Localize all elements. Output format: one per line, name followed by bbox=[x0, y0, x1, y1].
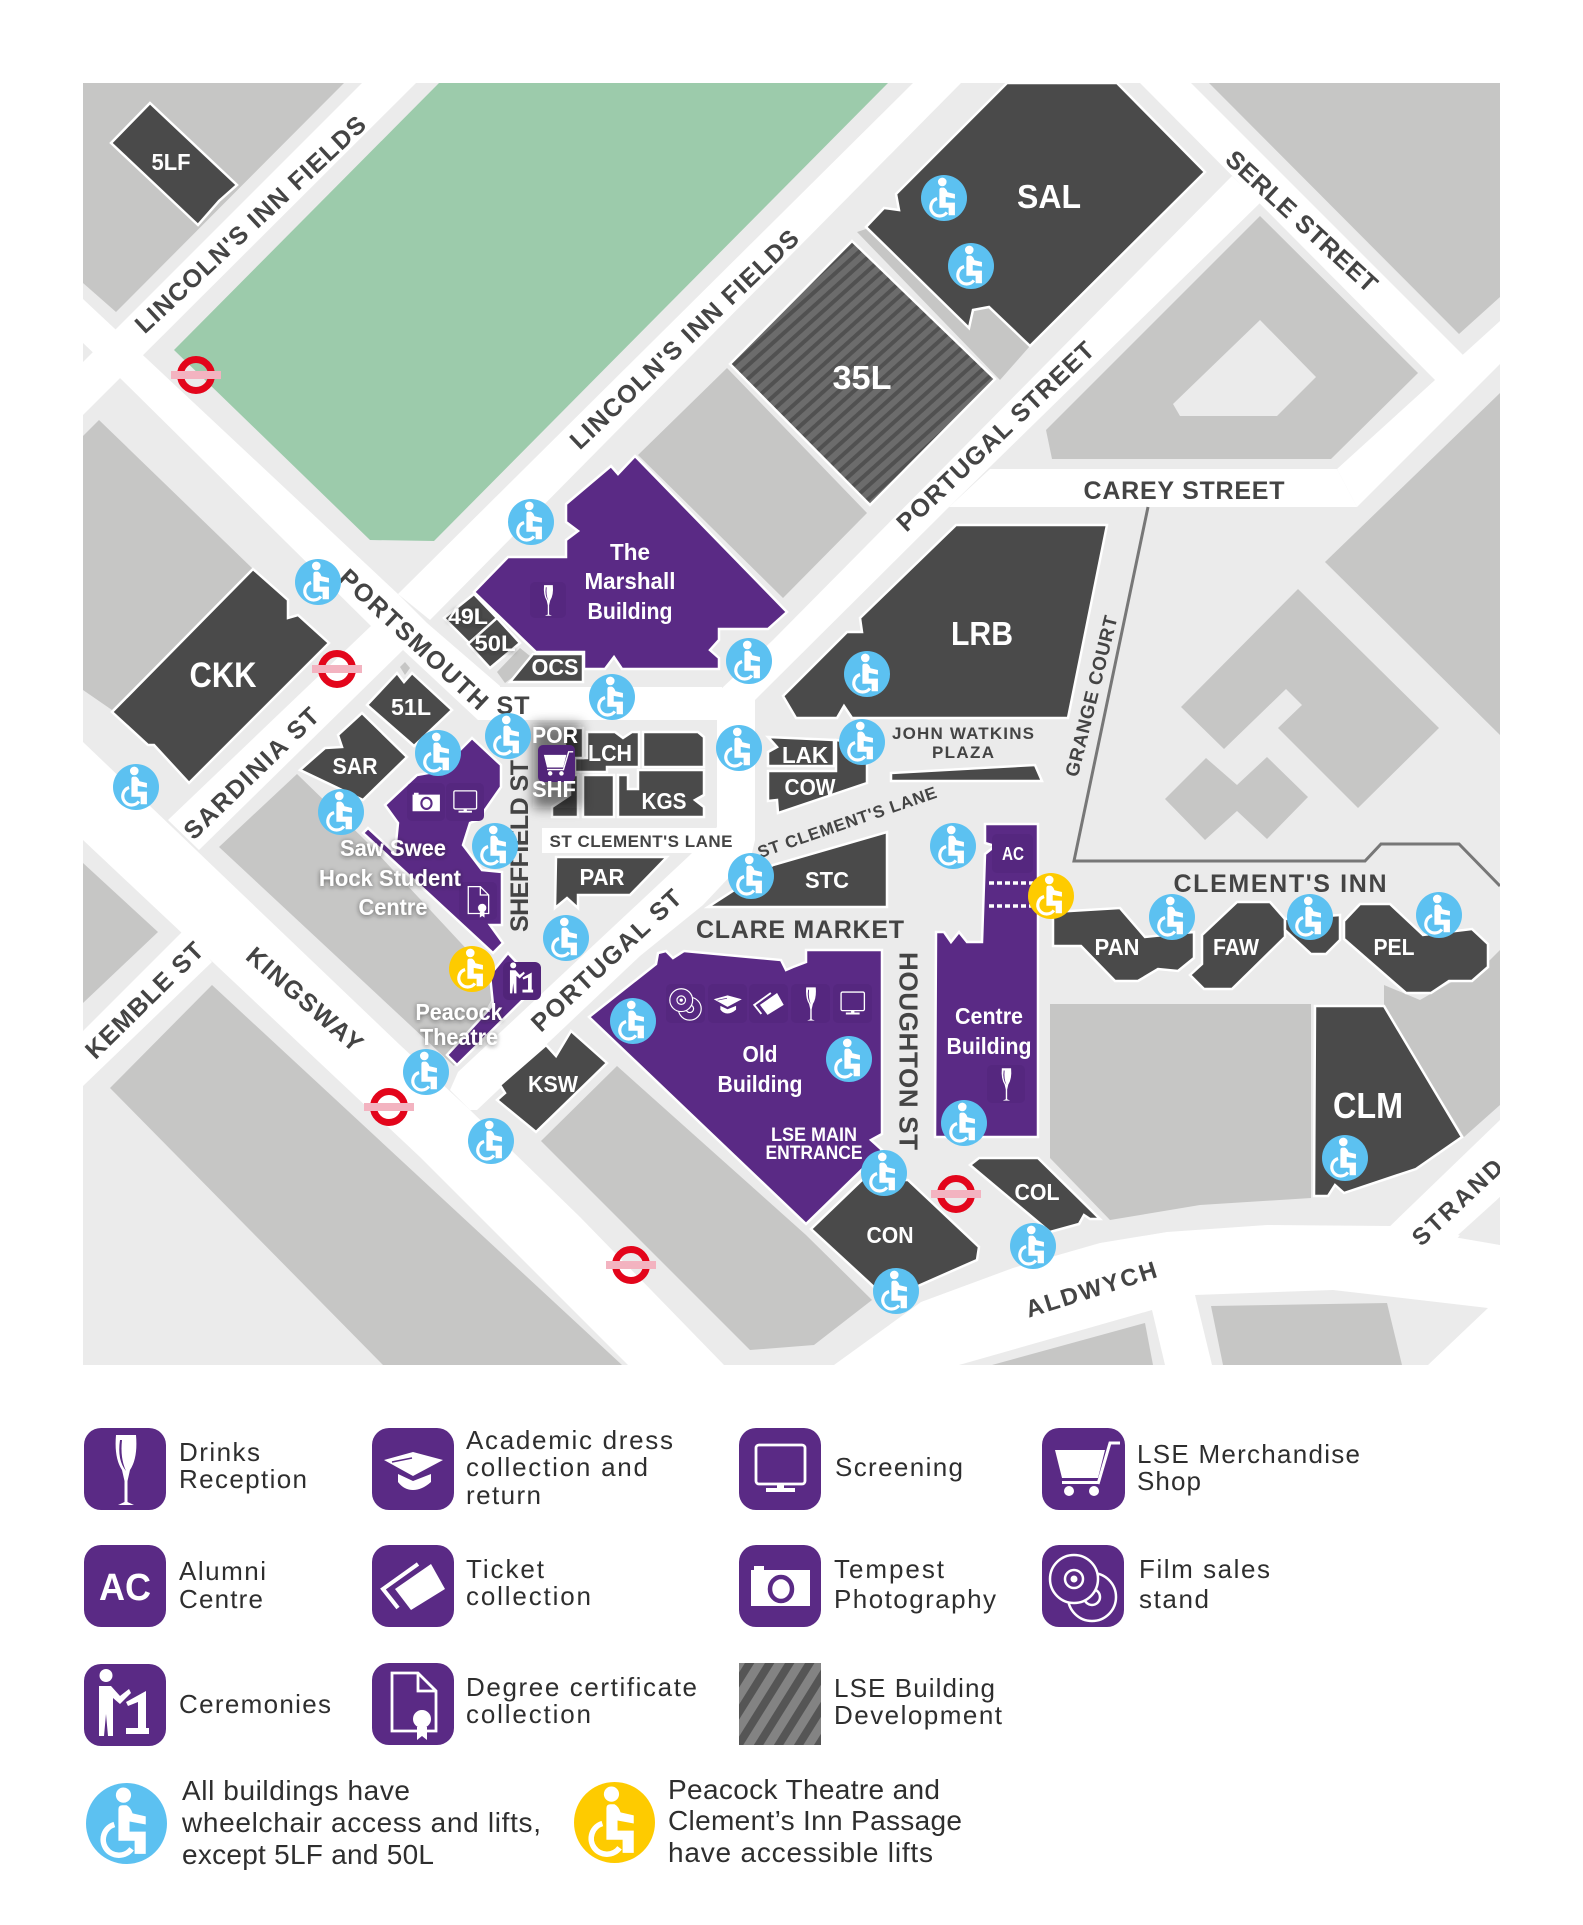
legend item: drinks reception: Reception bbox=[179, 1464, 307, 1494]
legend item: ticket collection: collection bbox=[466, 1581, 591, 1611]
legend note: accessible lifts: Clement’s Inn Passage bbox=[668, 1805, 962, 1836]
legend item: academic dress bbox=[372, 1425, 673, 1510]
building labels: CON bbox=[866, 1222, 914, 1248]
Grange Court boundary line bbox=[1074, 507, 1500, 886]
neighbouring blocks bbox=[83, 83, 1500, 1365]
POR / SHF labels and merchandise shop icon: SHF bbox=[532, 776, 576, 802]
Saw Swee Hock and Peacock labels: Saw Swee bbox=[340, 835, 446, 861]
building labels: SAL bbox=[1017, 178, 1081, 215]
POR / SHF labels and merchandise shop icon: POR bbox=[532, 722, 578, 748]
legend item: drinks reception bbox=[84, 1428, 307, 1510]
legend item: ticket collection bbox=[372, 1545, 591, 1627]
street labels: SHEFFIELD ST bbox=[506, 760, 534, 932]
street labels: STRAND bbox=[1407, 1154, 1509, 1252]
building labels: CKK bbox=[190, 656, 256, 695]
Saw Swee Hock and Peacock labels: Centre bbox=[358, 894, 428, 920]
map service icons: AC bbox=[1002, 844, 1024, 864]
building: Old Building: ENTRANCE bbox=[766, 1143, 862, 1164]
legend item: degree certificate bbox=[372, 1663, 697, 1745]
legend note: wheelchair access: All buildings have bbox=[182, 1775, 410, 1806]
legend item: alumni centre: Alumni bbox=[179, 1556, 266, 1586]
building labels: SAR bbox=[332, 753, 378, 779]
building labels: FAW bbox=[1213, 934, 1259, 960]
legend item: ceremonies bbox=[84, 1664, 331, 1746]
building: 35L development: 35L bbox=[832, 359, 892, 396]
legend item: screening bbox=[739, 1428, 963, 1510]
street labels: ST CLEMENT'S LANE bbox=[550, 832, 732, 851]
legend item: ticket collection: Ticket bbox=[466, 1554, 545, 1584]
Saw Swee Hock and Peacock labels: Peacock bbox=[416, 999, 503, 1025]
legend note: accessible lifts bbox=[574, 1774, 962, 1868]
legend item: film sales stand: Film sales bbox=[1139, 1554, 1270, 1584]
street labels: GRANGE COURT bbox=[1062, 613, 1123, 779]
legend item: merchandise shop: LSE Merchandise bbox=[1137, 1439, 1360, 1469]
street labels: HOUGHTON ST bbox=[894, 952, 924, 1150]
building labels: 49L bbox=[448, 604, 488, 629]
Saw Swee Hock and Peacock labels: Hock Student bbox=[319, 865, 461, 891]
street labels: ST bbox=[496, 692, 530, 720]
building: The Marshall Building bbox=[474, 456, 787, 669]
legend note: wheelchair access: wheelchair access and lifts, bbox=[181, 1807, 541, 1838]
building labels: PAR bbox=[580, 864, 625, 890]
legend note: wheelchair access bbox=[86, 1775, 541, 1870]
building labels: KGS bbox=[642, 788, 686, 814]
legend item: screening: Screening bbox=[835, 1452, 963, 1482]
street labels: PORTSMOUTH bbox=[333, 564, 493, 716]
underground stations bbox=[171, 360, 981, 1280]
street labels: PORTUGAL ST bbox=[526, 884, 688, 1037]
building: The Marshall Building: Marshall bbox=[584, 568, 676, 594]
building labels: OCS bbox=[532, 654, 578, 680]
legend item: drinks reception: Drinks bbox=[179, 1437, 260, 1467]
building labels: LCH bbox=[588, 740, 632, 766]
building labels: LRB bbox=[951, 615, 1013, 652]
building labels: COL bbox=[1014, 1179, 1060, 1205]
building labels: LAK bbox=[782, 742, 828, 768]
building labels: PEL bbox=[1374, 934, 1414, 960]
street labels: JOHN WATKINS bbox=[892, 724, 1034, 743]
building: Centre Building: Centre bbox=[955, 1003, 1023, 1029]
street labels: CAREY STREET bbox=[1084, 477, 1284, 505]
legend item: merchandise shop bbox=[1042, 1428, 1360, 1510]
street labels: KINGSWAY bbox=[240, 942, 368, 1058]
legend item: ceremonies: Ceremonies bbox=[179, 1689, 331, 1719]
building: The Marshall Building: Building bbox=[588, 598, 672, 624]
building labels: 51L bbox=[391, 694, 431, 720]
building labels: 50L bbox=[474, 631, 516, 656]
building: The Marshall Building: The bbox=[610, 539, 650, 565]
legend note: accessible lifts: have accessible lifts bbox=[668, 1837, 933, 1868]
building labels bbox=[152, 149, 1414, 1248]
building labels: PAN bbox=[1094, 934, 1140, 960]
street labels: SARDINIA ST bbox=[178, 702, 325, 845]
legend item: academic dress: collection and bbox=[466, 1452, 648, 1482]
street labels bbox=[80, 110, 1509, 1323]
building labels: 5LF bbox=[152, 149, 190, 175]
building: Old Building: Old bbox=[742, 1041, 778, 1067]
legend bbox=[84, 1425, 1360, 1870]
building: Centre Building bbox=[935, 824, 1038, 1137]
legend item: building development: LSE Building bbox=[834, 1673, 995, 1703]
Saw Swee Hock and Peacock labels: Theatre bbox=[420, 1024, 498, 1050]
building: 35L development bbox=[730, 241, 995, 505]
street labels: ALDWYCH bbox=[1022, 1257, 1160, 1323]
legend item: tempest photography: Photography bbox=[834, 1584, 996, 1614]
legend item: film sales stand: stand bbox=[1139, 1584, 1209, 1614]
building labels: COW bbox=[784, 774, 836, 800]
road network bbox=[83, 83, 1500, 1365]
building: Old Building: Building bbox=[718, 1071, 802, 1097]
street labels: ST CLEMENT'S LANE bbox=[755, 783, 939, 862]
street labels: CLARE MARKET bbox=[696, 916, 904, 944]
legend item: alumni centre: AC bbox=[99, 1567, 151, 1609]
legend item: alumni centre bbox=[84, 1545, 266, 1627]
legend item: tempest photography bbox=[739, 1545, 996, 1627]
street labels: SERLE STREET bbox=[1220, 145, 1383, 298]
campus map bbox=[80, 83, 1509, 1365]
street labels: LINCOLN'S INN FIELDS bbox=[565, 224, 805, 455]
building: Saw Swee Hock Student Centre bbox=[363, 738, 503, 953]
legend item: degree certificate: collection bbox=[466, 1699, 591, 1729]
building labels: STC bbox=[805, 867, 849, 893]
legend item: building development bbox=[739, 1663, 1003, 1745]
legend item: film sales stand bbox=[1042, 1545, 1270, 1627]
legend note: wheelchair access: except 5LF and 50L bbox=[182, 1839, 434, 1870]
map service icons bbox=[407, 582, 1033, 1103]
building: Old Building bbox=[589, 950, 882, 1224]
dark LSE buildings bbox=[111, 83, 1488, 1288]
legend item: academic dress: return bbox=[466, 1480, 541, 1510]
street labels: KEMBLE ST bbox=[80, 937, 209, 1065]
wheelchair access markers bbox=[113, 175, 1462, 1314]
legend note: accessible lifts: Peacock Theatre and bbox=[668, 1774, 940, 1805]
building: Peacock Theatre bbox=[446, 952, 524, 1066]
POR / SHF labels and merchandise shop icon bbox=[532, 722, 581, 808]
legend item: building development: Development bbox=[834, 1700, 1003, 1730]
legend item: merchandise shop: Shop bbox=[1137, 1466, 1201, 1496]
legend item: academic dress: Academic dress bbox=[466, 1425, 673, 1455]
LCH / KGS building cluster bbox=[552, 728, 704, 817]
building: Centre Building: Building bbox=[946, 1033, 1032, 1059]
street labels: LINCOLN'S INN FIELDS bbox=[130, 110, 372, 339]
building labels: KSW bbox=[528, 1071, 578, 1097]
legend item: tempest photography: Tempest bbox=[834, 1554, 945, 1584]
legend item: degree certificate: Degree certificate bbox=[466, 1672, 697, 1702]
street labels: PORTUGAL STREET bbox=[891, 336, 1100, 537]
building labels: CLM bbox=[1333, 1085, 1403, 1126]
legend item: alumni centre: Centre bbox=[179, 1584, 263, 1614]
building: Old Building: LSE MAIN bbox=[771, 1125, 857, 1146]
street labels: CLEMENT'S INN bbox=[1174, 870, 1386, 898]
park: Lincoln's Inn Fields bbox=[174, 83, 888, 541]
street labels: PLAZA bbox=[932, 743, 994, 762]
Saw Swee Hock and Peacock labels bbox=[319, 835, 503, 1050]
